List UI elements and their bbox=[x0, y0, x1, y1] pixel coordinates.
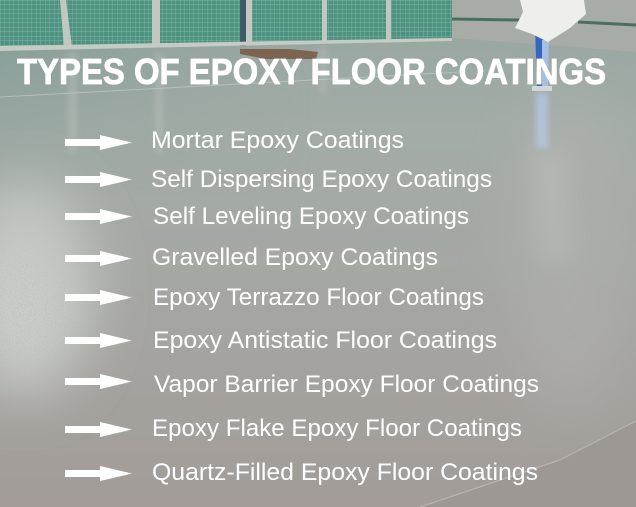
wall right bbox=[452, 0, 636, 52]
list item: Gravelled Epoxy Coatings: Gravelled Epoxy Coatings bbox=[152, 244, 438, 271]
icon: arrow bbox=[65, 374, 132, 389]
blue stand bbox=[535, 26, 549, 88]
list item: Self Leveling Epoxy Coatings: Self Leveling Epoxy Coatings bbox=[153, 203, 469, 230]
white sheet bbox=[515, 0, 586, 42]
list item: Quartz-Filled Epoxy Floor Coatings: Quartz-Filled Epoxy Floor Coatings bbox=[152, 459, 538, 486]
icon: arrow bbox=[65, 466, 132, 481]
icon: arrow bbox=[65, 251, 132, 266]
icon: arrow bbox=[65, 209, 132, 224]
icon: arrow bbox=[65, 422, 132, 437]
list item: Epoxy Terrazzo Floor Coatings: Epoxy Terrazzo Floor Coatings bbox=[153, 284, 484, 311]
posts bbox=[60, 0, 391, 47]
list item: Epoxy Flake Epoxy Floor Coatings: Epoxy Flake Epoxy Floor Coatings bbox=[152, 415, 522, 442]
icon: arrow bbox=[65, 135, 132, 150]
post reflections bbox=[68, 48, 326, 152]
list item: Self Dispersing Epoxy Coatings: Self Dispersing Epoxy Coatings bbox=[151, 166, 492, 193]
icon: arrow bbox=[65, 172, 132, 187]
list item: Epoxy Antistatic Floor Coatings: Epoxy Antistatic Floor Coatings bbox=[153, 327, 497, 354]
list item: Mortar Epoxy Coatings: Mortar Epoxy Coatings bbox=[151, 127, 404, 154]
icon: arrow bbox=[65, 290, 132, 305]
floor sheen bbox=[0, 180, 95, 400]
list item: Vapor Barrier Epoxy Floor Coatings: Vapor Barrier Epoxy Floor Coatings bbox=[154, 371, 539, 398]
icon: arrow bbox=[65, 333, 132, 348]
mesh wall bbox=[0, 0, 452, 46]
